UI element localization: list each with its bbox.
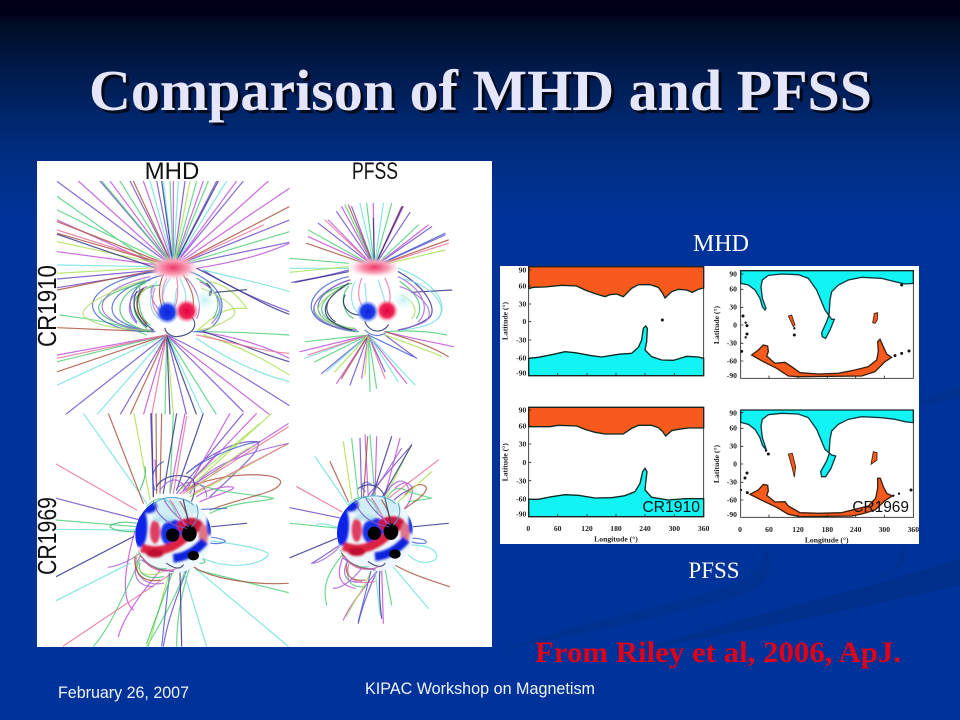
- latitude axis: -90: [516, 369, 526, 378]
- chart: PFSS CR1910 map: 0: [526, 524, 530, 533]
- axes: 0: [733, 459, 737, 468]
- chart: MHD field lines CR1910: [57, 181, 289, 415]
- axes: 60: [729, 424, 737, 433]
- latitude axis: 60: [519, 281, 527, 290]
- axes: -60: [516, 495, 526, 504]
- latitude axis: [500, 265, 527, 378]
- orange coronal hole: [750, 478, 892, 517]
- axes: Latitude (°): [500, 443, 509, 481]
- panel: coronal hole maps: [500, 265, 919, 545]
- chart: PFSS CR1969 map: 0: [738, 525, 742, 534]
- field source: polar cap: [348, 257, 400, 277]
- chart: PFSS CR1969 map: 360: [908, 525, 919, 534]
- cyan coronal hole: [741, 410, 913, 477]
- title shadow: Comparison of MHD and PFSS: [92, 61, 875, 126]
- label: PFSS: PFSS: [688, 558, 740, 583]
- latitude axis: 90: [519, 265, 527, 274]
- axes: 60: [519, 422, 527, 431]
- chart: PFSS CR1910 map: [500, 406, 710, 544]
- latitude axis: 0: [523, 317, 527, 326]
- chart: MHD field lines CR1969: [56, 413, 289, 647]
- chart: PFSS CR1969 map: 300: [879, 525, 890, 534]
- chart: PFSS CR1969 map: Longitude (°): [805, 536, 849, 545]
- chart: PFSS CR1910 map: 300: [669, 524, 680, 533]
- chart: PFSS CR1910 map: 180: [610, 524, 622, 533]
- chart: PFSS CR1969 map: 120: [792, 525, 804, 534]
- chart: PFSS field lines CR1969: [290, 435, 449, 623]
- citation: From Riley et al, 2006, ApJ.: [535, 636, 901, 669]
- axes: 0: [523, 458, 527, 467]
- axes: 30: [519, 440, 527, 449]
- cyan south coronal hole: [529, 468, 704, 517]
- latitude axis: Latitude (°): [500, 301, 509, 340]
- label: CR1969: CR1969: [852, 499, 909, 516]
- latitude axis: 0: [733, 320, 737, 329]
- latitude axis: [712, 269, 737, 380]
- heading: MHD column: MHD: [145, 158, 199, 185]
- latitude axis: -60: [516, 354, 526, 363]
- latitude axis: 30: [729, 303, 737, 312]
- chart: PFSS field lines CR1910: [290, 203, 453, 392]
- axes: -30: [727, 478, 737, 487]
- chart: PFSS CR1910 map: Longitude (°): [594, 535, 638, 544]
- latitude axis: -30: [516, 335, 526, 344]
- axes: -60: [727, 495, 737, 504]
- latitude axis: 60: [729, 285, 737, 294]
- axes: -90: [516, 510, 526, 519]
- row label: CR1969: CR1969: [32, 497, 62, 575]
- row label: CR1910: CR1910: [32, 265, 62, 347]
- chart: PFSS CR1969 map: 240: [850, 525, 862, 534]
- chart: PFSS CR1969 map: [712, 408, 919, 545]
- axes: [712, 408, 737, 519]
- field source: red pole: [175, 299, 199, 323]
- chart: MHD CR1910 map: [500, 265, 704, 378]
- orange north coronal hole: [529, 407, 704, 436]
- field source: pale region: [393, 290, 414, 310]
- panel: magnetic field line comparison: [32, 158, 492, 647]
- footer: date: February 26, 2007: [58, 683, 189, 702]
- cyan coronal hole: [741, 271, 913, 338]
- orange north coronal hole: [529, 267, 704, 298]
- title text: Comparison of MHD and PFSS: [89, 58, 872, 123]
- field source: blue pole: [356, 300, 379, 323]
- field source: red pole: [376, 299, 398, 322]
- latitude axis: -90: [727, 371, 737, 380]
- axes: Latitude (°): [712, 444, 721, 483]
- latitude axis: Latitude (°): [712, 305, 721, 344]
- latitude axis: 90: [729, 269, 737, 278]
- label: CR1910: CR1910: [642, 499, 700, 516]
- label: MHD: MHD: [693, 231, 749, 257]
- axes: -30: [516, 476, 526, 485]
- orange coronal hole: [752, 339, 892, 377]
- chart: PFSS CR1910 map: 120: [581, 524, 593, 533]
- latitude axis: -60: [727, 356, 737, 365]
- sun surface: [334, 495, 414, 571]
- axes: 90: [729, 408, 737, 417]
- axes: [500, 406, 527, 519]
- chart: PFSS CR1969 map: 60: [765, 525, 773, 534]
- latitude axis: 30: [519, 299, 527, 308]
- chart: PFSS CR1910 map: 60: [554, 524, 562, 533]
- cyan south coronal hole: [529, 326, 704, 376]
- axes: 30: [729, 442, 737, 451]
- field source: blue pole: [155, 300, 179, 324]
- sun surface: [133, 497, 212, 573]
- decorative swoosh shapes: [500, 388, 960, 650]
- chart: PFSS CR1910 map: 360: [698, 524, 710, 533]
- footer: event name: KIPAC Workshop on Magnetism: [365, 679, 595, 698]
- chart: PFSS CR1910 map: 240: [639, 524, 651, 533]
- field source: polar cap: [147, 255, 200, 280]
- heading: PFSS column: PFSS: [352, 158, 398, 185]
- latitude axis: -30: [727, 339, 737, 348]
- axes: 90: [519, 406, 527, 415]
- chart: MHD CR1969 map: [712, 269, 913, 380]
- axes: -90: [727, 510, 737, 519]
- chart: PFSS CR1969 map: 180: [822, 525, 833, 534]
- field source: pale region: [193, 288, 217, 312]
